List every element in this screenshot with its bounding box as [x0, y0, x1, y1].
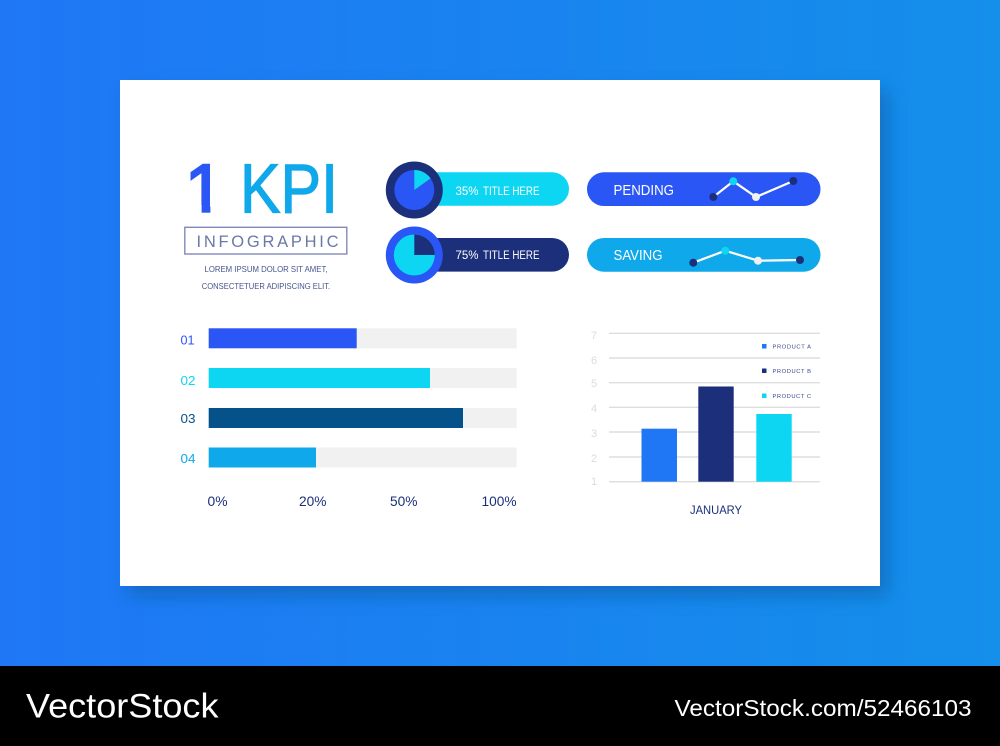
legend: PRODUCT B [772, 369, 811, 375]
footer url: VectorStock.com/52466103 [674, 695, 972, 721]
footer logo: VectorStock [26, 688, 220, 726]
subtitle box: INFOGRAPHIC [185, 227, 347, 254]
bar row 04: 04 [180, 451, 196, 466]
card shadow [128, 90, 888, 596]
bar row 03: 03 [180, 411, 196, 426]
sparkline: pending [709, 177, 797, 201]
bar row 03 [180, 408, 517, 428]
pill: 35% title here [420, 172, 569, 206]
y axis labels: 1 [591, 476, 597, 488]
title: 1 KPI: 1 [185, 150, 224, 228]
y axis labels [591, 330, 597, 488]
pill: pending with sparkline: PENDING [614, 183, 674, 199]
column: product B [698, 386, 734, 482]
icon: pie 35% [386, 162, 443, 218]
description text [202, 264, 330, 291]
legend [762, 344, 811, 400]
title: 1 KPI: KPI [240, 150, 338, 228]
y axis labels: 4 [591, 403, 597, 415]
bar row 01 [180, 328, 517, 348]
pill: 75% title here: TITLE HERE [483, 250, 540, 262]
bar row 02 [180, 368, 517, 388]
pill: 75% title here: 75% [456, 250, 478, 262]
title: 1 KPI [182, 150, 338, 228]
column: product A [642, 429, 677, 482]
description text: CONSECTETUER ADIPISCING ELIT. [202, 281, 330, 291]
y axis labels: 3 [591, 428, 597, 440]
column: product C [756, 414, 792, 482]
axis labels: 0% [208, 493, 228, 509]
pill: 35% title here: TITLE HERE [483, 186, 540, 198]
axis labels: 20% [299, 493, 326, 509]
chart: horizontal bars [180, 328, 517, 509]
title block [182, 150, 347, 291]
bar row 01: 01 [180, 332, 194, 348]
legend: PRODUCT C [772, 394, 811, 400]
chart: column chart [591, 330, 820, 517]
axis labels [208, 493, 516, 509]
axis labels: 100% [482, 493, 516, 509]
bar row 02: 02 [180, 373, 196, 388]
subtitle box: INFOGRAPHIC: INFOGRAPHIC [196, 233, 339, 251]
y axis labels: 6 [591, 355, 597, 367]
footer bar [0, 666, 1000, 746]
pill: pending with sparkline [587, 172, 820, 206]
pill: 35% title here: 35% [456, 186, 478, 198]
pill: saving with sparkline: SAVING [614, 248, 662, 264]
panel: white card [120, 80, 880, 586]
bar row 04 [180, 448, 517, 468]
pill: 75% title here [420, 238, 569, 272]
description text: LOREM IPSUM DOLOR SIT AMET, [204, 264, 328, 274]
axis labels: 50% [390, 493, 418, 509]
y axis labels: 7 [591, 330, 597, 342]
y axis labels: 2 [591, 453, 597, 465]
sparkline: saving [689, 247, 804, 267]
icon: pie 75% [386, 226, 443, 284]
y axis labels: 5 [591, 378, 597, 390]
legend: PRODUCT A [772, 344, 811, 350]
x axis label: JANUARY [690, 503, 742, 517]
pill: saving with sparkline [587, 238, 820, 272]
